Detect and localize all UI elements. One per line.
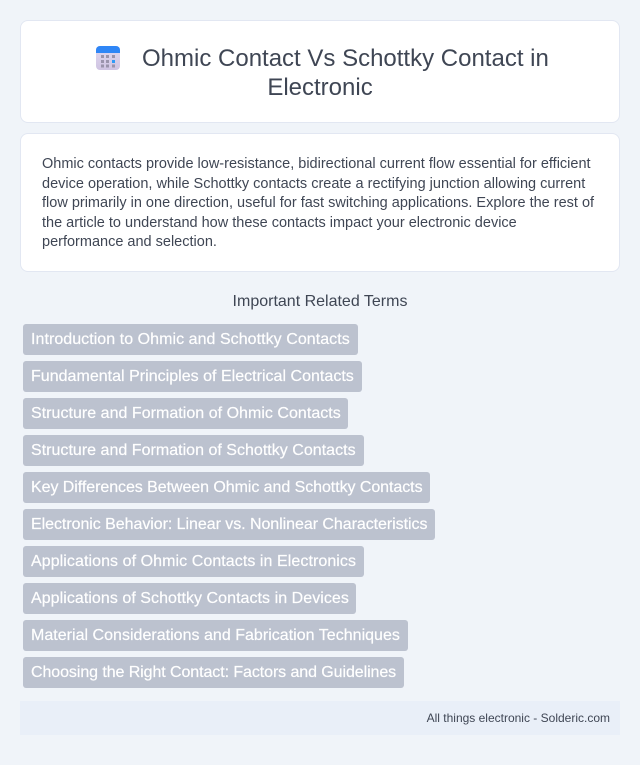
- tag: Applications of Ohmic Contacts in Electronics: [31, 553, 356, 570]
- text: description: performance and selection.: [42, 234, 217, 250]
- text: description: device operation, while Schottky contacts create a rectifying junction allowing current: [42, 176, 585, 192]
- tag: [23, 546, 364, 577]
- tag: Structure and Formation of Schottky Contacts: [31, 442, 356, 459]
- tag: Electronic Behavior: Linear vs. Nonlinear Characteristics: [31, 516, 427, 533]
- text: footer credit: All things electronic - Solderic.com: [427, 711, 610, 725]
- tag: Key Differences Between Ohmic and Schottky Contacts: [31, 479, 423, 496]
- tag: Structure and Formation of Ohmic Contacts: [31, 405, 341, 422]
- tag: [23, 361, 362, 392]
- text: description: the article to understand how these contacts impact your electronic device: [42, 215, 517, 231]
- icon: calendar: [96, 46, 120, 70]
- tag: [23, 509, 435, 540]
- tag: [23, 583, 356, 614]
- tag: [23, 472, 430, 503]
- tag: [23, 435, 364, 466]
- heading: important related terms: Important Related Terms: [233, 293, 407, 310]
- tag: Fundamental Principles of Electrical Contacts: [31, 368, 354, 385]
- footer: [20, 701, 620, 735]
- text: description: Ohmic contacts provide low-resistance, bidirectional current flow essential for efficient: [42, 156, 591, 172]
- tag: Choosing the Right Contact: Factors and Guidelines: [31, 664, 396, 681]
- tag: Introduction to Ohmic and Schottky Contacts: [31, 331, 350, 348]
- text: description: flow primarily in one direction, useful for fast switching applications. Explore the rest of: [42, 195, 594, 211]
- tag: Applications of Schottky Contacts in Devices: [31, 590, 349, 607]
- tag: [23, 657, 404, 688]
- tag: [23, 398, 348, 429]
- tag: [23, 324, 358, 355]
- tag: Material Considerations and Fabrication Techniques: [31, 627, 400, 644]
- panel: title header: [20, 20, 620, 123]
- text: description: [42, 156, 594, 250]
- heading: title line 1: Ohmic Contact Vs Schottky Contact in: [142, 45, 549, 72]
- heading: title line 2: Electronic: [267, 74, 373, 101]
- tag list: [23, 324, 435, 688]
- tag: [23, 620, 408, 651]
- panel: description: [20, 133, 620, 272]
